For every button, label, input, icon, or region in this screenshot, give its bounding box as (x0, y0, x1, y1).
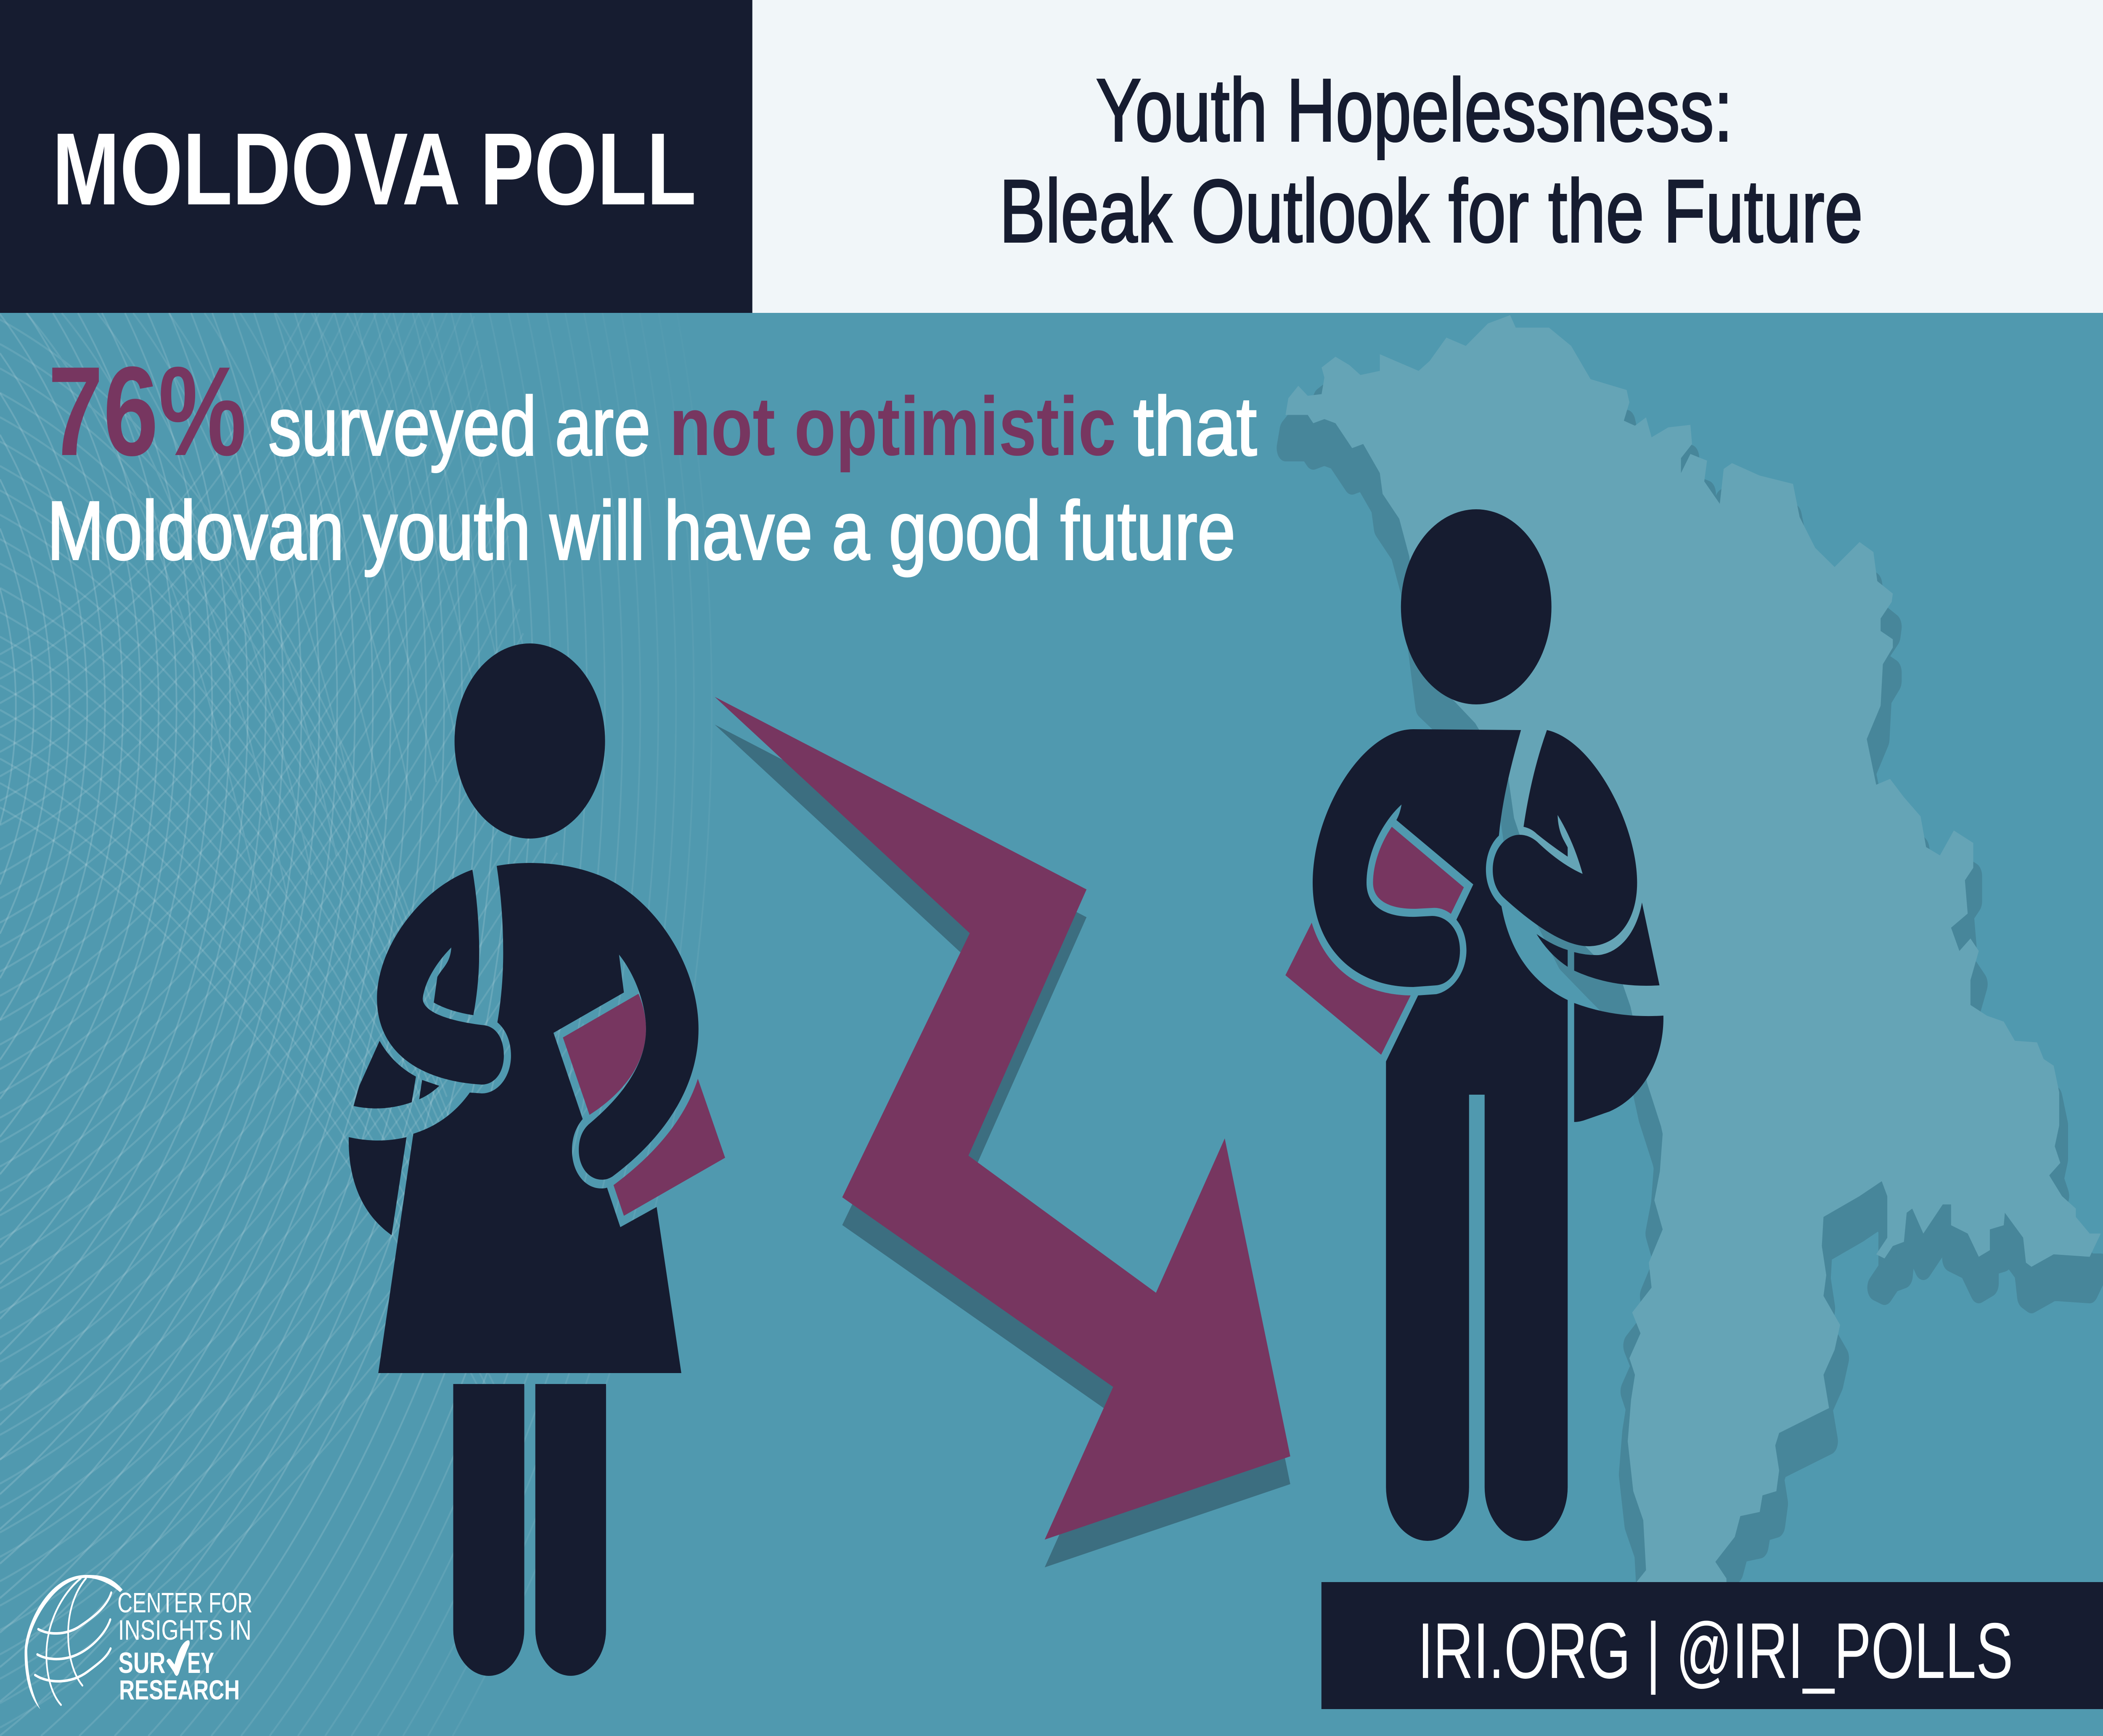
backpack (1536, 902, 1663, 1122)
torso, arm and legs (1313, 729, 1568, 1541)
logo: Center for Insights in Survey Research (25, 1575, 252, 1709)
header: light subtitle panel (752, 0, 2103, 313)
map of Moldova with shadow (1285, 315, 2101, 1624)
icon: check mark (167, 1640, 190, 1676)
legs (453, 1384, 606, 1676)
torso and skirt (378, 863, 699, 1373)
map shadow (1285, 348, 2101, 1624)
book (1285, 827, 1464, 1055)
footer links: IRI.ORG | @IRI_POLLS (1418, 1606, 2013, 1695)
icon: female student figure (349, 643, 725, 1676)
survey word with check mark: EY (187, 1646, 214, 1680)
arrow: downward trend (715, 697, 1290, 1567)
subtitle: Youth Hopelessness: (1096, 61, 1733, 160)
title: MOLDOVA POLL (52, 112, 696, 227)
arrow shadow (715, 725, 1290, 1567)
backpack (349, 1041, 439, 1235)
subtitle (999, 61, 1863, 261)
subtitle: Bleak Outlook for the Future (999, 162, 1863, 261)
headline statement: surveyed are (268, 380, 651, 473)
headline statement (47, 341, 1257, 577)
footer bar (1322, 1582, 2103, 1709)
logo: Center for Insights in Survey Research: INSIGHTS IN (118, 1614, 252, 1646)
headline statement: Moldovan youth will have a good future (47, 484, 1235, 577)
right arm (1493, 730, 1637, 946)
book (563, 994, 725, 1216)
icon: globe (25, 1575, 123, 1709)
head (1401, 509, 1552, 704)
left arm (377, 870, 504, 1085)
header: dark title panel (0, 0, 752, 313)
logo: Center for Insights in Survey Research: CENTER FOR (117, 1587, 252, 1619)
highlighted phrase: not optimistic (669, 380, 1116, 473)
background guilloche line pattern (0, 313, 710, 1736)
76 percent figure: 76% (48, 341, 246, 482)
head (455, 643, 605, 839)
map shape (1285, 315, 2101, 1591)
survey word with check mark: SUR (119, 1646, 165, 1680)
arrow body (715, 697, 1290, 1540)
logo: Center for Insights in Survey Research: RESEARCH (119, 1675, 240, 1706)
headline statement: that (1133, 380, 1257, 473)
icon: male student figure (1285, 509, 1663, 1541)
